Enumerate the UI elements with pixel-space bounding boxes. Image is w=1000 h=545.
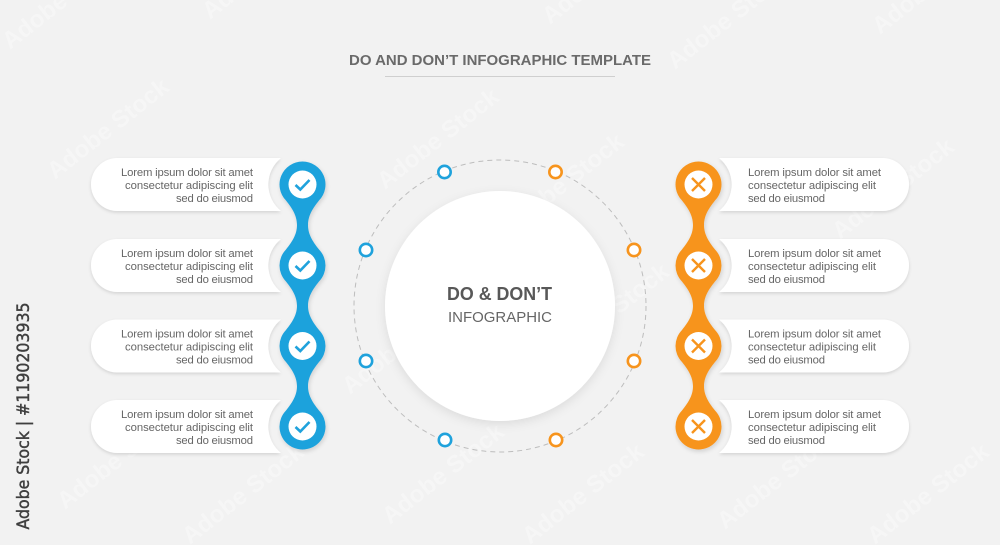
- background watermark: Adobe Stock: [827, 133, 960, 245]
- centre circle: [385, 191, 615, 421]
- don't card 1: Lorem ipsum dolor sit amet: [748, 167, 882, 179]
- do card 4: [91, 400, 281, 453]
- don't card 2: Lorem ipsum dolor sit amet: [748, 248, 882, 260]
- icon: check marks: [288, 170, 316, 440]
- do card 1: [91, 158, 281, 211]
- background watermark: Adobe Stock: [372, 83, 505, 195]
- do card 4: consectetur adipiscing elit: [125, 422, 254, 434]
- do card 2: consectetur adipiscing elit: [125, 261, 254, 273]
- background watermark: Adobe Stock: [377, 418, 510, 530]
- don't card 4: Lorem ipsum dolor sit amet: [748, 409, 882, 421]
- background watermark: Adobe Stock: [542, 258, 675, 370]
- do card 3: Lorem ipsum dolor sit amet: [121, 328, 254, 340]
- do card 3: consectetur adipiscing elit: [125, 342, 254, 354]
- background watermark: Adobe Stock: [712, 423, 845, 535]
- blue bead chain: [280, 162, 326, 450]
- orange bead chain: [676, 162, 722, 450]
- don't card 1: [719, 158, 909, 211]
- icon: cross marks: [684, 170, 712, 440]
- do card 4: Lorem ipsum dolor sit amet: [121, 409, 254, 421]
- don't card 3: Lorem ipsum dolor sit amet: [748, 328, 882, 340]
- centre subheading: INFOGRAPHIC: [448, 309, 552, 326]
- don't card 3: sed do eiusmod: [748, 354, 825, 366]
- don't card 3: [719, 320, 909, 372]
- do card 1: Lorem ipsum dolor sit amet: [121, 167, 254, 179]
- background watermark: Adobe Stock: [337, 288, 470, 400]
- icon: cross 3: [684, 332, 712, 360]
- panel: don't items: [719, 158, 909, 453]
- do card 1: sed do eiusmod: [176, 193, 253, 205]
- icon: cross 2: [684, 252, 712, 280]
- centre heading: DO & DON’T: [447, 284, 552, 304]
- icon: cross 4: [684, 412, 712, 440]
- side credit: Adobe Stock | #1190203935: [14, 302, 34, 530]
- don't card 1: sed do eiusmod: [748, 193, 825, 205]
- blue ring dots: [360, 166, 451, 446]
- do card 3: [91, 320, 281, 372]
- icon: check 2: [288, 252, 316, 280]
- do card 2: [91, 239, 281, 292]
- don't card 4: [719, 400, 909, 453]
- don't card 3: consectetur adipiscing elit: [748, 342, 877, 354]
- don't card 4: consectetur adipiscing elit: [748, 422, 877, 434]
- icon: check 4: [288, 412, 316, 440]
- icon: check 1: [288, 170, 316, 198]
- orange ring dots: [549, 166, 640, 446]
- panel: do items: [91, 158, 281, 453]
- dashed ring: [354, 160, 646, 452]
- icon: cross 1: [684, 170, 712, 198]
- do card 4: sed do eiusmod: [176, 435, 253, 447]
- title: DO AND DON’T INFOGRAPHIC TEMPLATE: [349, 53, 651, 69]
- background watermark: Adobe Stock: [497, 128, 630, 240]
- do card 2: sed do eiusmod: [176, 274, 253, 286]
- don't card 2: [719, 239, 909, 292]
- background watermark: Adobe Stock: [42, 73, 175, 185]
- background watermark: Adobe Stock: [52, 403, 185, 515]
- icon: check 3: [288, 332, 316, 360]
- do card 1: consectetur adipiscing elit: [125, 180, 254, 192]
- title underline: [385, 76, 615, 77]
- don't card 2: consectetur adipiscing elit: [748, 261, 877, 273]
- do card 3: sed do eiusmod: [176, 354, 253, 366]
- do card 2: Lorem ipsum dolor sit amet: [121, 248, 254, 260]
- don't card 4: sed do eiusmod: [748, 435, 825, 447]
- don't card 2: sed do eiusmod: [748, 274, 825, 286]
- don't card 1: consectetur adipiscing elit: [748, 180, 877, 192]
